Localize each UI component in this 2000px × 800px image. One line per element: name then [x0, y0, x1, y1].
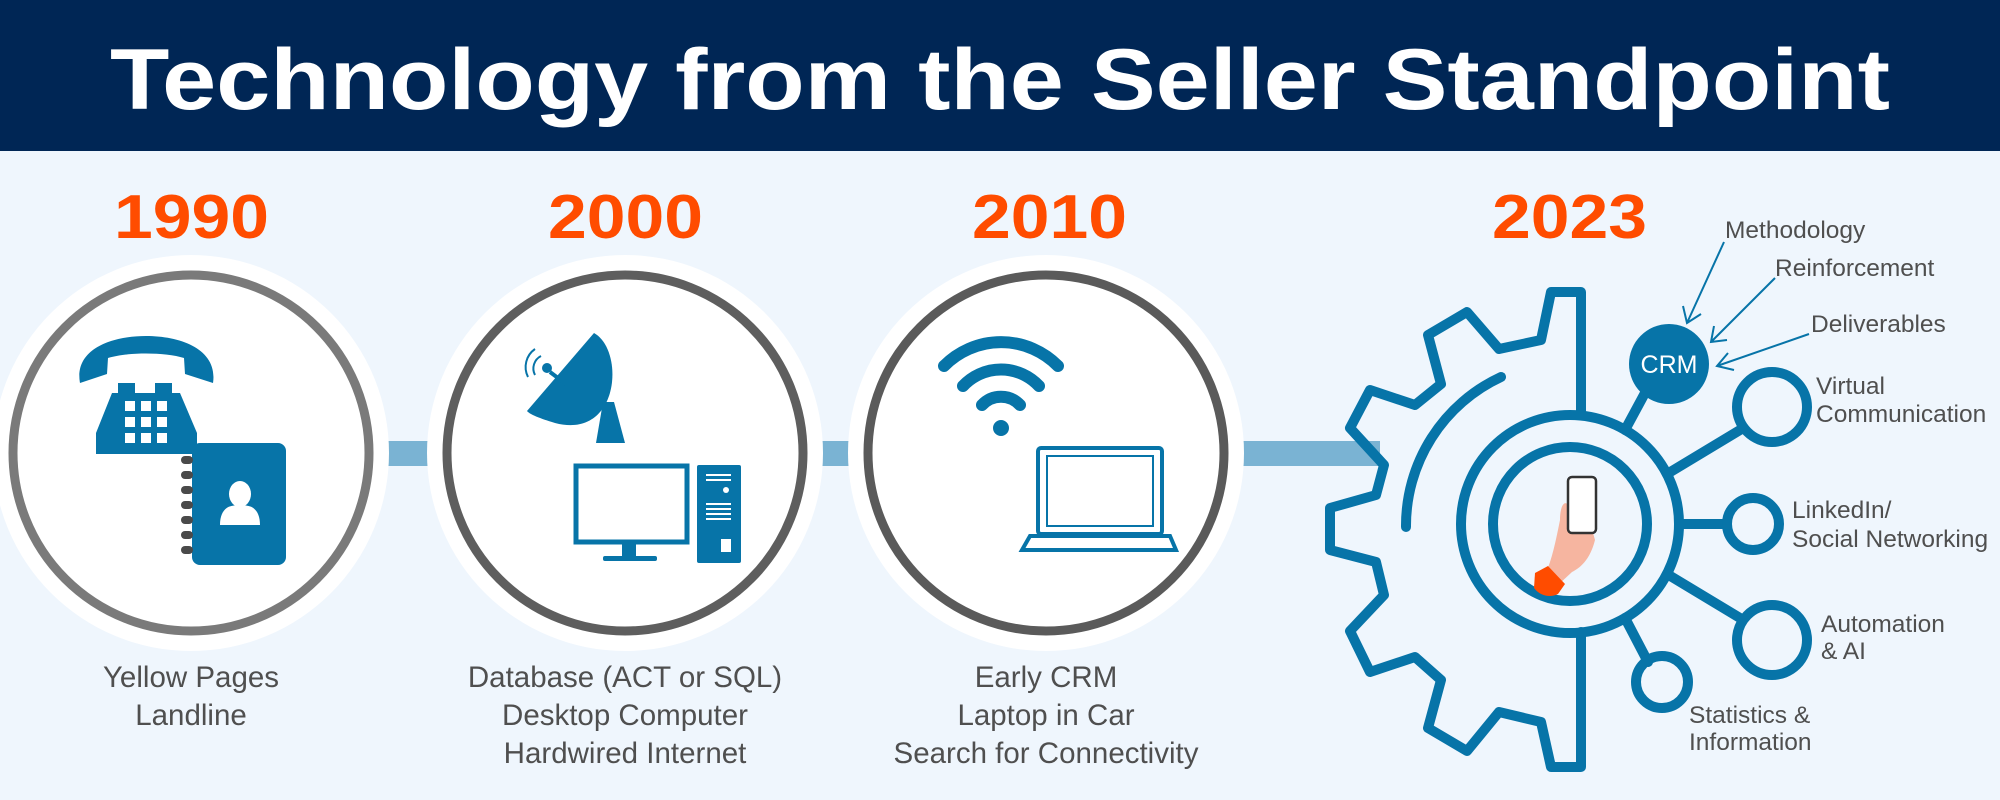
caption: 2000: Database (ACT or SQL)	[468, 661, 782, 694]
icon: laptop	[1022, 448, 1176, 550]
labels: 2023: Information	[1689, 729, 1812, 756]
year: 2010: 2010	[972, 183, 1127, 252]
caption: 2000	[468, 661, 782, 770]
title: Technology from the Seller Standpoint	[110, 32, 1890, 128]
icon: desktop computer	[576, 465, 741, 563]
caption: 2010: Laptop in Car	[957, 699, 1135, 732]
labels: 2023: Communication	[1816, 401, 1986, 428]
caption: 1990: Yellow Pages	[103, 661, 279, 694]
node circles	[1737, 372, 1807, 442]
year: 2000: 2000	[548, 183, 703, 252]
labels: 2023: Automation	[1821, 611, 1945, 638]
year: 2023: 2023	[1492, 183, 1647, 252]
caption: 2000: Hardwired Internet	[504, 737, 746, 770]
circle panel: 1990	[0, 255, 389, 651]
labels: 2023: Reinforcement	[1775, 255, 1935, 282]
half gear outline	[1330, 292, 1581, 767]
labels: 2023: Statistics &	[1689, 702, 1810, 729]
icon: hand holding phone	[1534, 477, 1596, 596]
circle panel: 2010	[848, 255, 1244, 651]
caption: 2010: Early CRM	[975, 661, 1117, 694]
labels: 2023: & AI	[1821, 638, 1866, 665]
icon: satellite dish	[526, 333, 625, 443]
icon: wifi	[944, 342, 1058, 433]
labels: 2023: LinkedIn/	[1792, 497, 1892, 524]
year: 1990: 1990	[114, 183, 269, 252]
labels: 2023: Deliverables	[1811, 311, 1946, 338]
rings	[1461, 415, 1679, 633]
caption: 2000: Desktop Computer	[502, 699, 748, 732]
icon: telephone	[79, 336, 213, 454]
inner arc	[1406, 377, 1501, 527]
CRM node: CRM	[1641, 351, 1697, 379]
gear diagram: 2023	[1330, 292, 1807, 767]
circle panel: 2000	[427, 255, 823, 651]
labels: 2023: Virtual	[1816, 373, 1885, 400]
caption: 2010	[894, 661, 1199, 770]
caption: 1990	[103, 661, 279, 732]
labels: 2023	[1689, 217, 1988, 756]
labels: 2023: Methodology	[1725, 217, 1866, 244]
header banner	[0, 0, 2000, 151]
connector bars	[385, 441, 1380, 466]
caption: 2010: Search for Connectivity	[894, 737, 1199, 770]
arrows to CRM	[1683, 242, 1809, 370]
spokes	[1625, 380, 1652, 430]
CRM node	[1629, 324, 1709, 404]
labels: 2023: Social Networking	[1792, 526, 1988, 553]
caption: 1990: Landline	[135, 699, 247, 732]
icon: address book	[181, 443, 286, 565]
